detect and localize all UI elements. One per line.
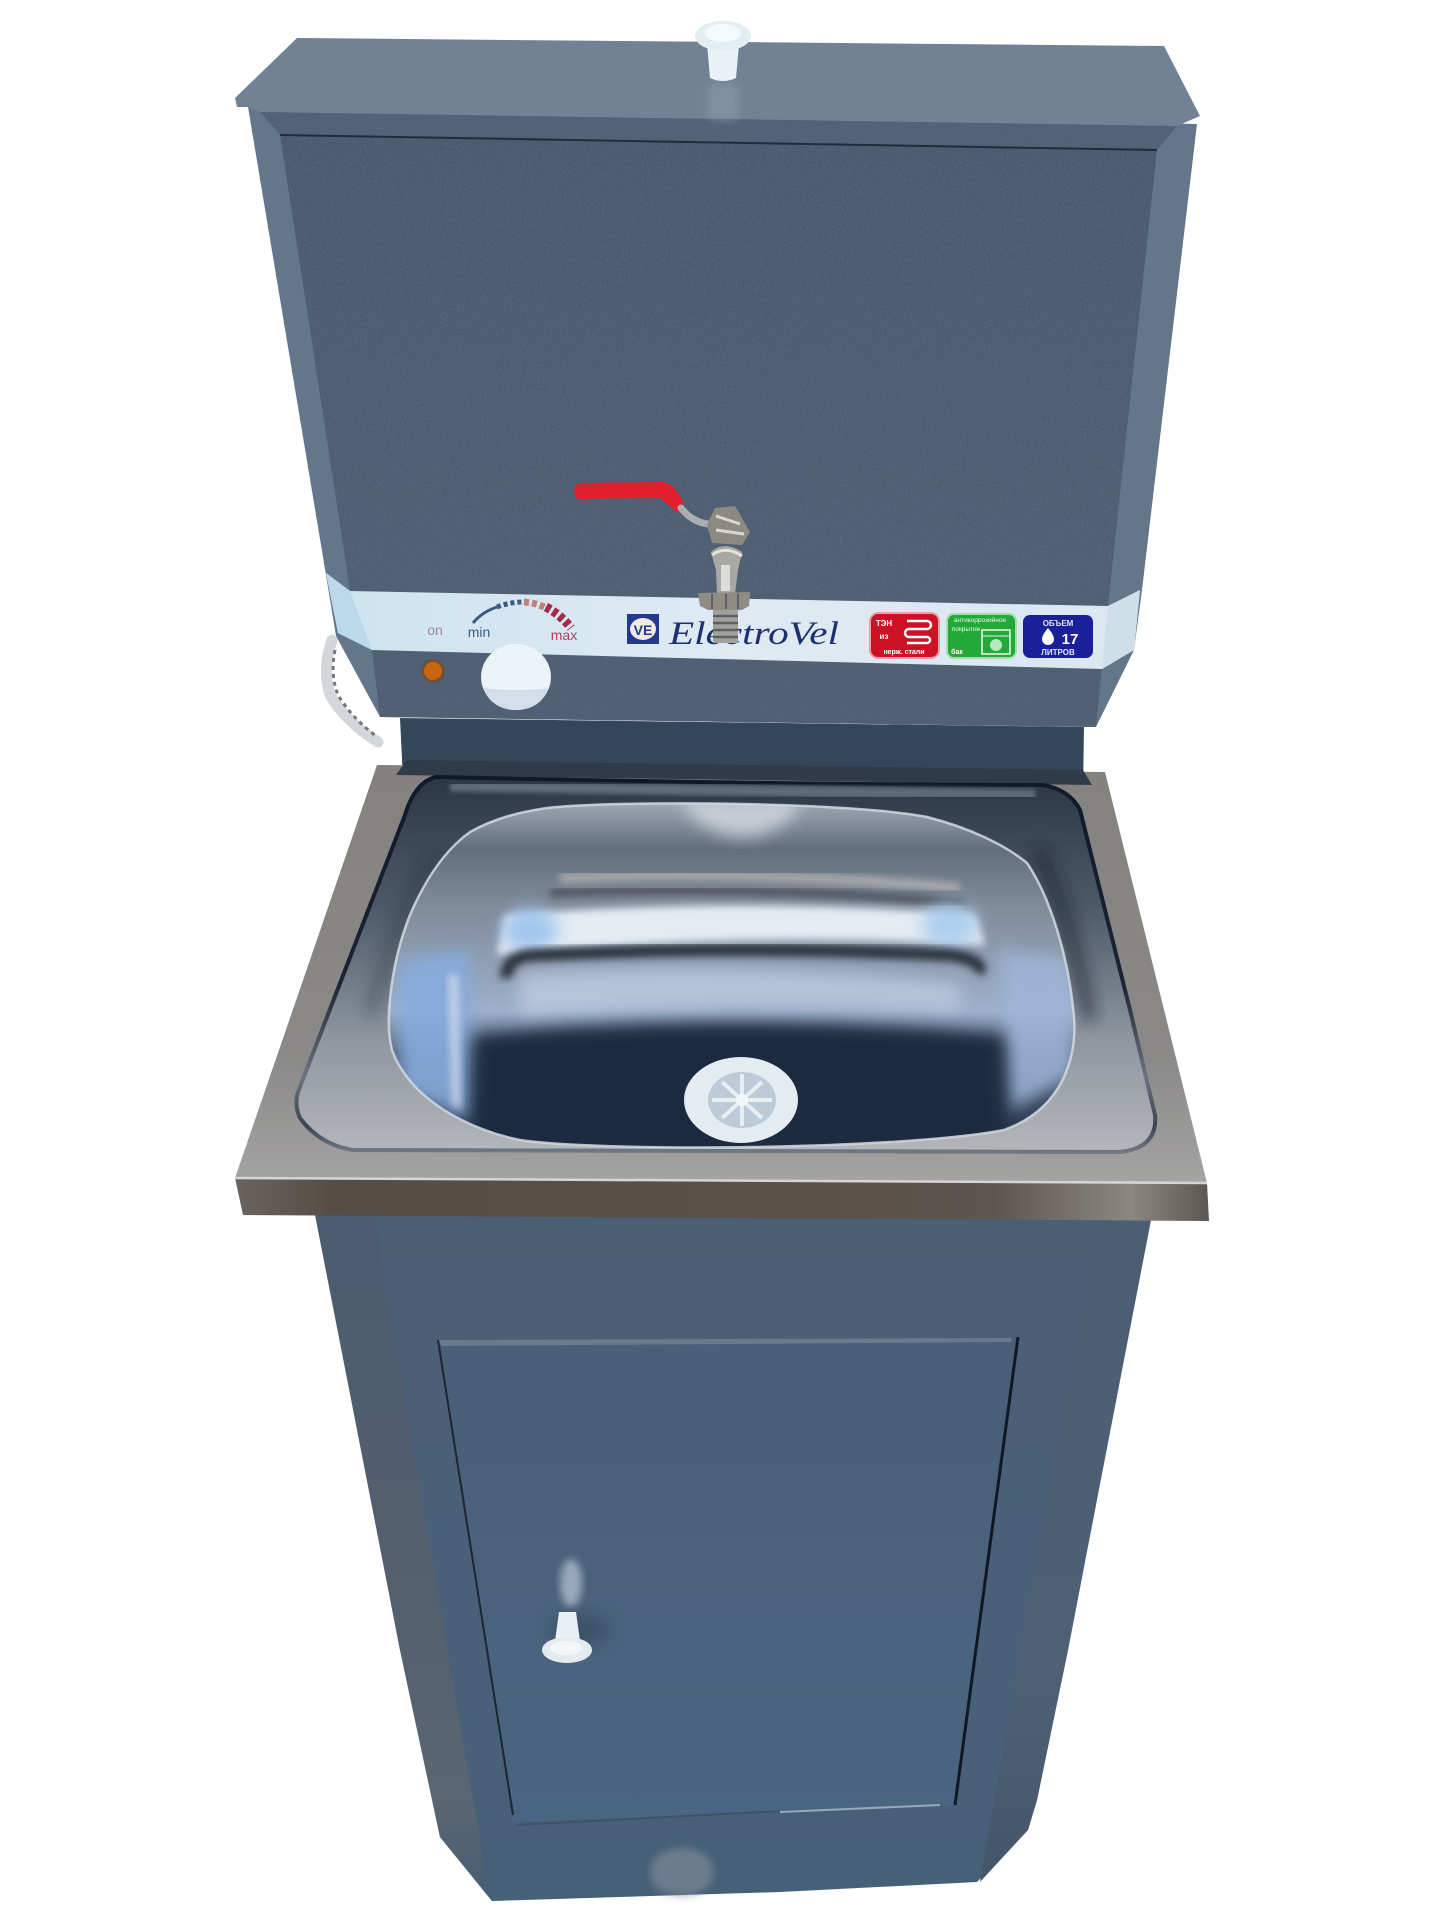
tank lid front lip xyxy=(260,112,1177,150)
cabinet scuff xyxy=(650,1848,714,1896)
hex nut xyxy=(698,592,750,610)
bright reflection xyxy=(497,906,985,955)
cabinet door xyxy=(438,1337,1018,1825)
badge: volume: ОБЪЕМ xyxy=(1043,619,1074,628)
door latch xyxy=(542,1612,592,1663)
rear sink strip xyxy=(396,760,1092,785)
tank front panel xyxy=(280,135,1157,727)
power cable xyxy=(326,640,378,742)
badge: heating element: ТЭН xyxy=(876,619,892,628)
bowl central sheen xyxy=(680,800,800,838)
bowl floor shadow xyxy=(474,1022,1004,1155)
side grooves xyxy=(1038,848,1090,1020)
logo wordmark: ElectroVel xyxy=(668,616,839,652)
red lever xyxy=(574,482,684,513)
label: min: min xyxy=(468,624,490,640)
door latch highlight xyxy=(560,1559,582,1607)
badge: coating xyxy=(947,614,1016,658)
side reflections xyxy=(398,950,470,1120)
valve body xyxy=(707,506,750,545)
badge: coating: покрытие xyxy=(952,626,981,633)
lower cabinet xyxy=(315,1210,1152,1901)
label: max: max xyxy=(551,627,577,643)
badge: heating element xyxy=(870,613,939,658)
badge: heating element: нерж. стали xyxy=(883,649,925,656)
badge: coating: бак xyxy=(951,648,963,656)
dark fold xyxy=(507,950,979,978)
cabinet right facet xyxy=(980,1215,1152,1882)
tank lid top xyxy=(235,38,1200,126)
faucet xyxy=(574,482,750,643)
sink bowl xyxy=(380,795,1090,1155)
badge: heating element: из xyxy=(880,632,888,641)
logo mark: VE xyxy=(634,622,652,638)
sink top surface xyxy=(235,765,1207,1183)
lower light area xyxy=(520,969,960,1015)
drain xyxy=(684,1057,798,1143)
filler cap xyxy=(695,21,751,81)
tank side faces xyxy=(248,107,1197,727)
threaded nozzle xyxy=(713,610,738,643)
cabinet left facet xyxy=(315,1215,492,1901)
temperature gauge xyxy=(473,602,571,628)
rear recess highlight xyxy=(450,786,1035,795)
sink recess xyxy=(296,777,1155,1152)
upper grey fold xyxy=(560,876,960,888)
back neck xyxy=(400,718,1084,790)
badge: coating: антикоррозийное xyxy=(954,616,1006,624)
badge: volume: ЛИТРОВ xyxy=(1041,648,1075,657)
spout xyxy=(711,546,742,594)
sink xyxy=(235,760,1209,1221)
thermostat knob xyxy=(481,644,551,710)
door latch shadow xyxy=(550,1614,610,1646)
water tank xyxy=(235,38,1200,727)
badge: volume xyxy=(1023,615,1093,658)
label band xyxy=(326,573,1140,669)
badge: volume: 17 xyxy=(1062,631,1078,648)
sink front edge xyxy=(235,1178,1209,1221)
indicator lamp xyxy=(421,659,445,683)
logo mark xyxy=(627,614,659,644)
label: on: on xyxy=(427,622,443,638)
